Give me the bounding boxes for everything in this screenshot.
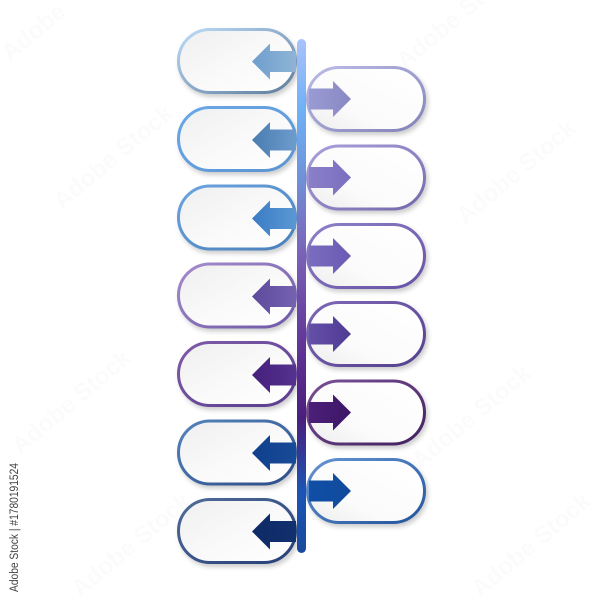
watermark pattern: Adobe Stock bbox=[452, 114, 582, 230]
left pill 4 bbox=[178, 264, 296, 327]
watermark pattern: Adobe Stock bbox=[49, 99, 179, 215]
watermark pattern: Adobe Stock bbox=[407, 359, 537, 475]
right pill 5 bbox=[308, 381, 424, 444]
left pill 3 bbox=[178, 186, 296, 249]
left arrow 3 bbox=[252, 200, 296, 236]
right pill 3 bbox=[308, 224, 424, 288]
right arrow 4 bbox=[309, 316, 351, 352]
left arrow 1 bbox=[252, 44, 296, 80]
right pill 1 bbox=[308, 68, 424, 130]
left arrow 6 bbox=[252, 435, 296, 471]
watermark pattern: Adobe Stock bbox=[467, 487, 597, 600]
left pill 7 bbox=[178, 500, 296, 562]
left pill 5 bbox=[178, 342, 296, 406]
right pill 2 bbox=[308, 146, 424, 209]
left pill 6 bbox=[178, 421, 296, 484]
left arrow 7 bbox=[252, 514, 296, 550]
left pill 2 bbox=[178, 108, 296, 170]
right arrow 3 bbox=[309, 238, 351, 274]
watermark pattern: Adobe Stock bbox=[7, 344, 137, 460]
right arrow 1 bbox=[309, 81, 351, 117]
left arrow 2 bbox=[252, 122, 296, 158]
left pill 1 bbox=[178, 30, 296, 92]
right arrow 2 bbox=[309, 160, 351, 196]
right arrow 6 bbox=[309, 473, 351, 509]
watermark pattern: Adobe Stock bbox=[67, 487, 197, 600]
stock credit text: Adobe Stock | #1780191524 bbox=[9, 462, 21, 592]
central timeline bar bbox=[297, 39, 306, 553]
right pill 6 bbox=[308, 460, 424, 522]
left arrow 5 bbox=[252, 357, 296, 393]
right pill 4 bbox=[308, 302, 424, 366]
left arrow 4 bbox=[252, 278, 296, 314]
right arrow 5 bbox=[309, 394, 351, 430]
